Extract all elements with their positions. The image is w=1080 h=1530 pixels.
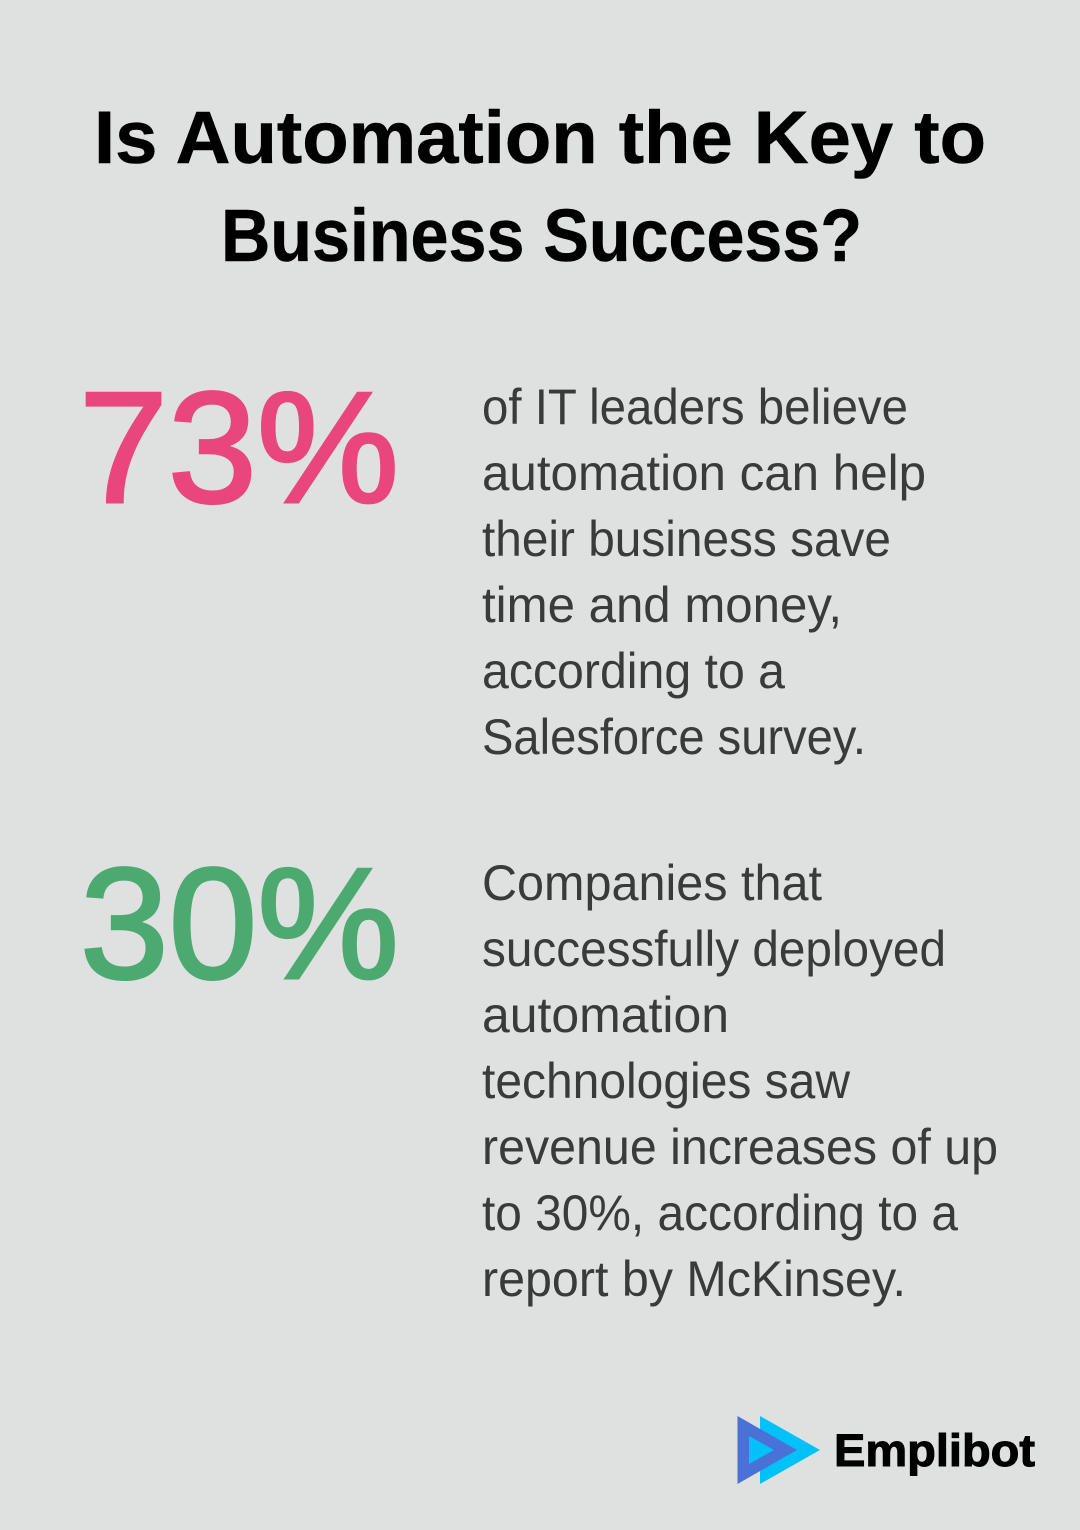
text block: McKinsey statistic: revenue increases of up [482,1119,998,1175]
stat: 73%: 73% [79,360,399,536]
text block: McKinsey statistic: automation [482,987,729,1043]
text block: IT leaders statistic: Salesforce survey. [482,709,866,765]
title: Business Success? [221,194,862,277]
text block: McKinsey statistic: report by McKinsey. [482,1251,906,1307]
text block: McKinsey statistic: technologies saw [482,1053,851,1109]
wordmark: Emplibot [834,1425,1035,1476]
text block: McKinsey statistic: successfully deployed [482,921,946,977]
text block: McKinsey statistic [482,855,998,1307]
stat: 30%: 30% [80,836,399,1012]
text block: IT leaders statistic: of IT leaders believe [482,379,908,435]
text block: IT leaders statistic [482,379,926,765]
text block: IT leaders statistic: according to a [482,643,785,699]
text block: IT leaders statistic: automation can help [482,445,926,501]
text block: IT leaders statistic: their business save [482,511,891,567]
title: Is Automation the Key to [94,96,986,179]
title [94,96,986,277]
text block: IT leaders statistic: time and money, [482,577,842,633]
text block: McKinsey statistic: to 30%, according to a [482,1185,958,1241]
icon: play triangles [738,1416,820,1484]
logo: Emplibot [738,1416,1035,1484]
text block: McKinsey statistic: Companies that [482,855,822,911]
